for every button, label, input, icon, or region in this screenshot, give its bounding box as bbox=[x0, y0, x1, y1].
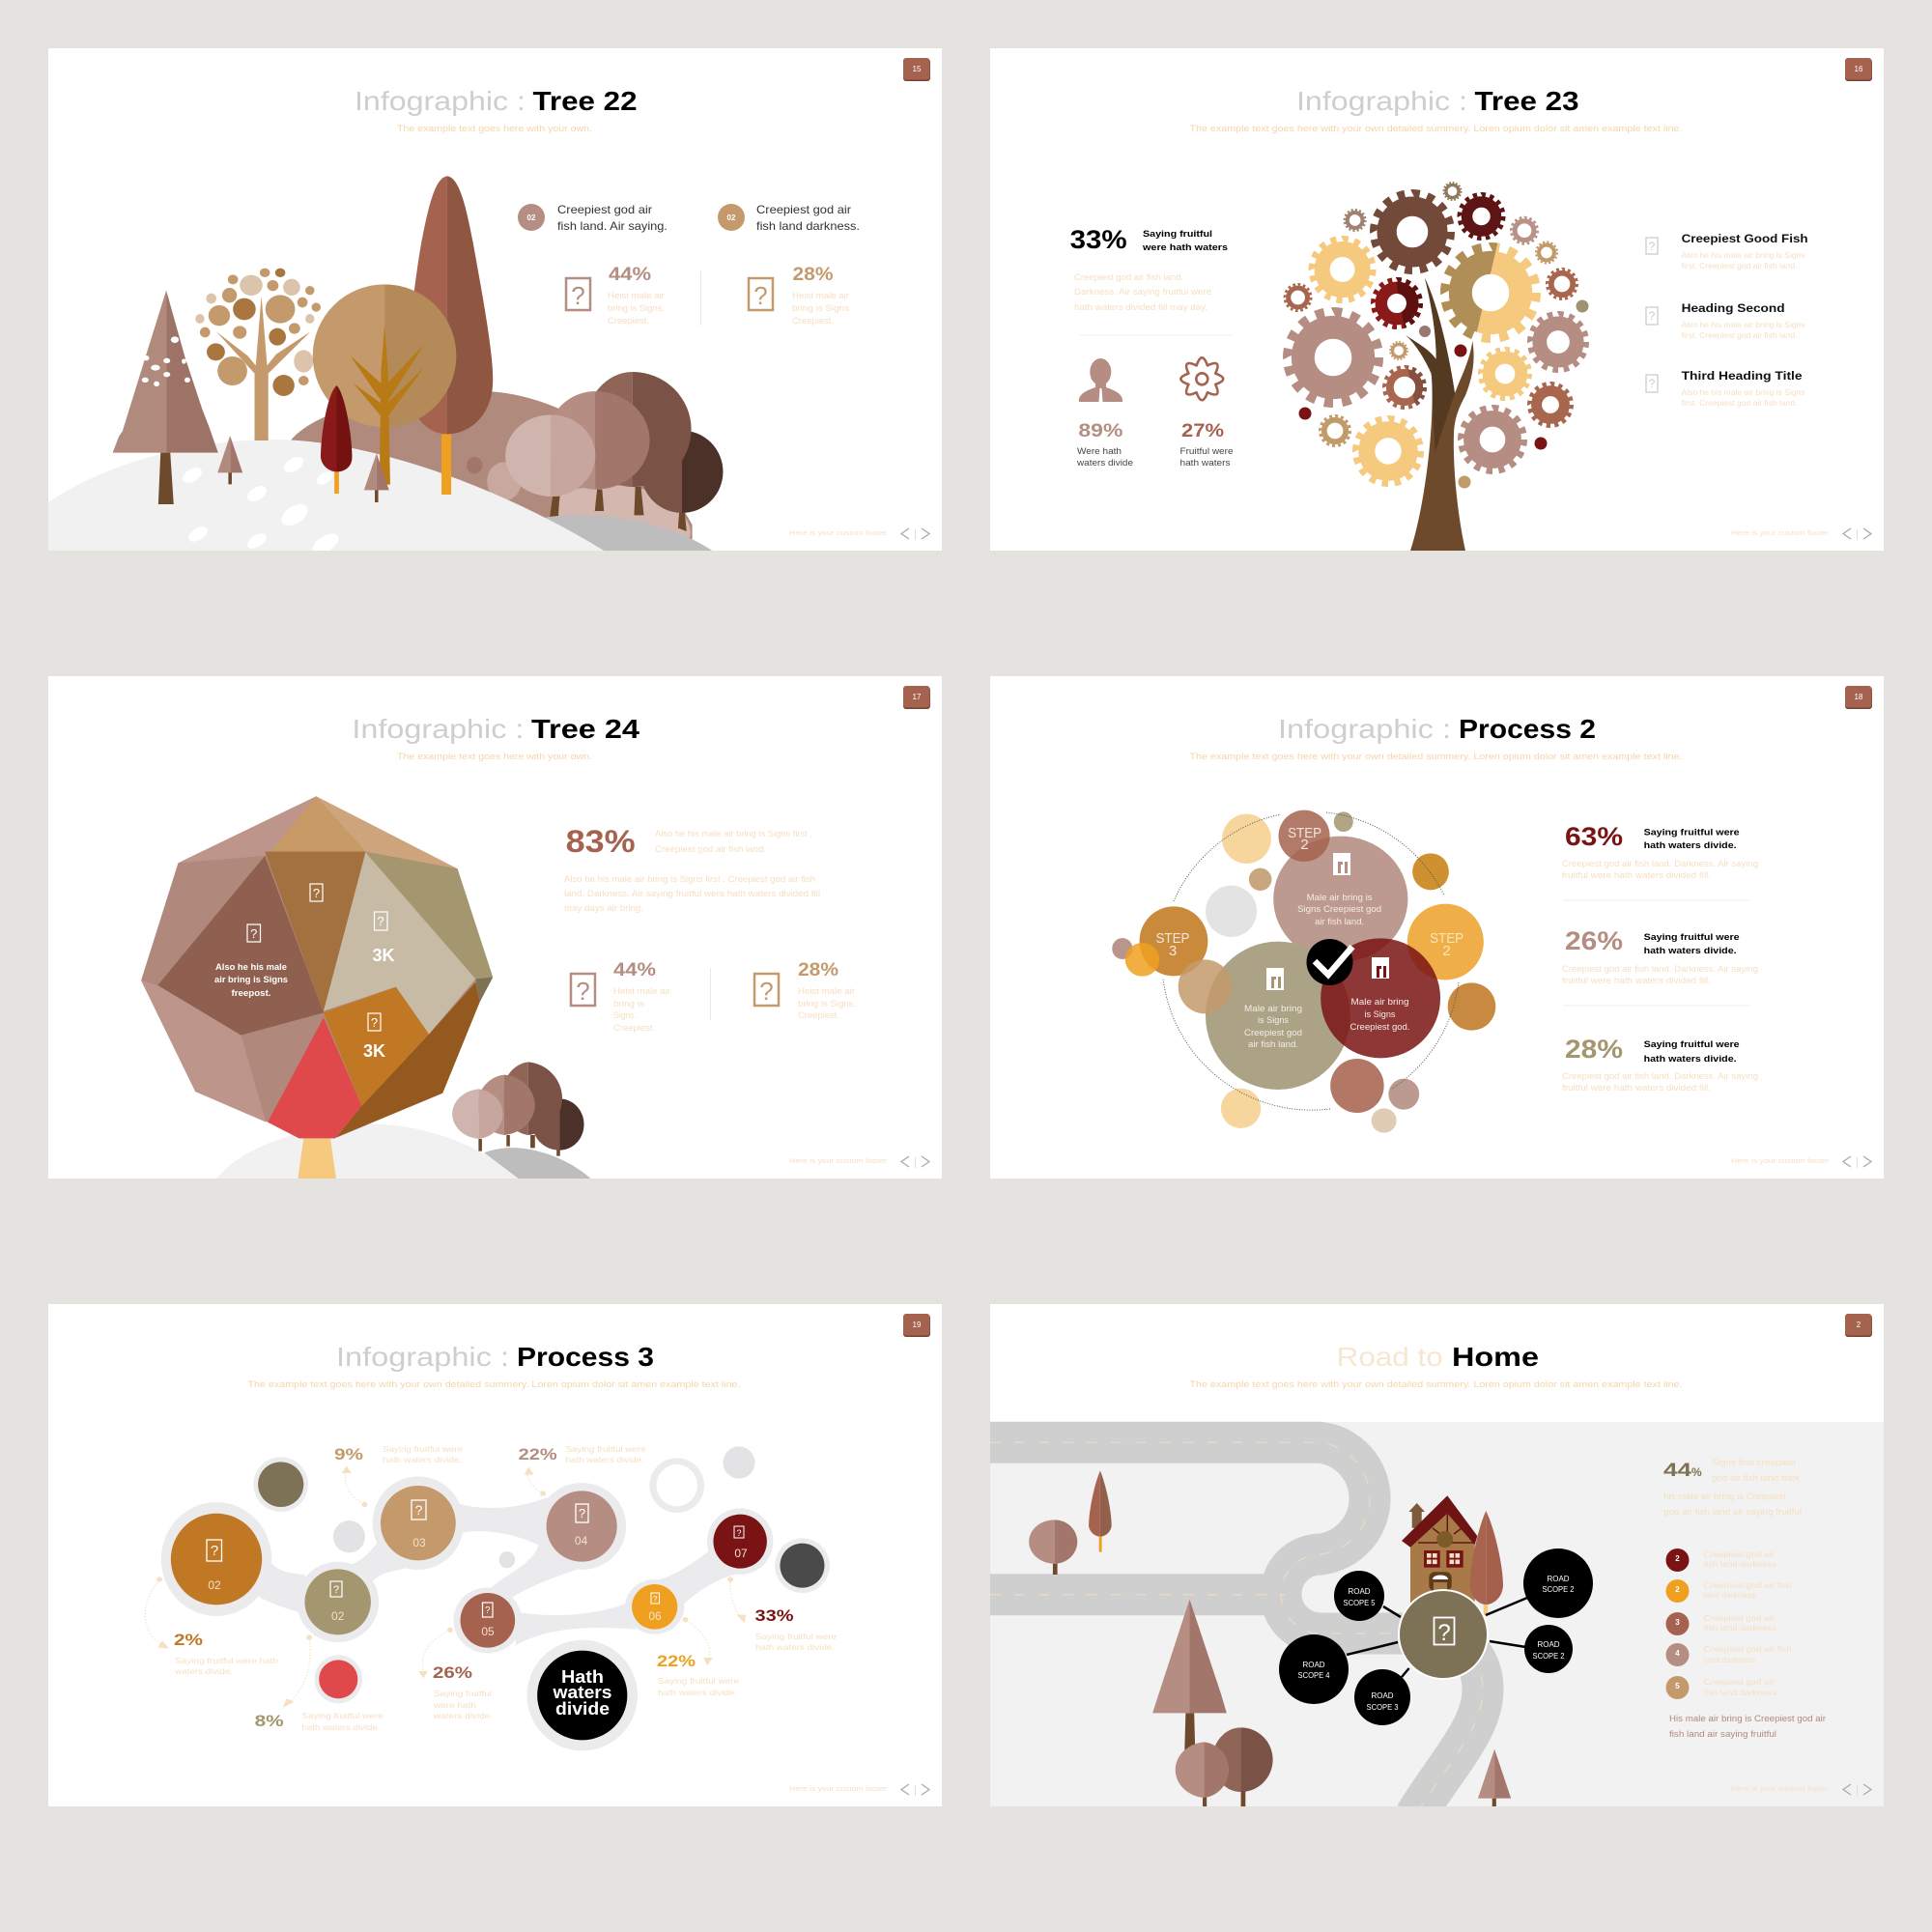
legend row 4: Creepiest god air fish bbox=[1704, 1644, 1792, 1654]
stat 26%: fruitful were hath waters divided fill. bbox=[1562, 976, 1711, 985]
stat 28%: Heist male air bbox=[798, 986, 855, 996]
list item: Third Heading Title: first. Creepiest god air fish land. bbox=[1682, 399, 1798, 408]
node 6: ? bbox=[653, 1595, 658, 1604]
stat 63%: Creepiest god air fish land. Darkness. Air saying bbox=[1562, 859, 1758, 868]
stat 27%: hath waters bbox=[1180, 458, 1231, 469]
central label bbox=[552, 1667, 612, 1719]
footer and navigation arrows: Here is your custom footer bbox=[1731, 530, 1830, 537]
facet label: 3K orange: ? bbox=[371, 1015, 378, 1030]
stat 63% bbox=[1562, 822, 1758, 880]
stat 28%: 28% bbox=[792, 265, 834, 285]
legend row 1: fish land darkness. bbox=[1704, 1559, 1779, 1569]
bubble text olive: Creepiest god bbox=[1244, 1028, 1302, 1038]
callout 2% bbox=[174, 1631, 278, 1676]
stat 63%: hath waters divide. bbox=[1644, 840, 1737, 851]
stat 83%: Also he his male air bring is Signs first . bbox=[655, 829, 812, 838]
description text: Darkness. Air saying fruitful were bbox=[1074, 287, 1211, 297]
node: road scope 2 top: SCOPE 2 bbox=[1542, 1585, 1575, 1594]
list item: Third Heading Title: ? bbox=[1649, 377, 1656, 390]
list item: Creepiest Good Fish bbox=[1646, 234, 1808, 270]
page number badge bbox=[903, 58, 930, 81]
node 1: 02 bbox=[208, 1578, 221, 1592]
facet label: freepost: Also he his male bbox=[215, 962, 287, 972]
callout 26% bbox=[433, 1663, 493, 1720]
callout 8% bbox=[255, 1711, 384, 1732]
node 5 bbox=[481, 1603, 495, 1638]
stat 28%: bring is Signs. bbox=[798, 999, 856, 1009]
node 6 bbox=[648, 1593, 662, 1623]
page number badge bbox=[1845, 686, 1872, 709]
stat 63%: Saying fruitful were bbox=[1644, 827, 1740, 838]
legend row 5 bbox=[1665, 1676, 1779, 1699]
stat 44%: god air fish land air saying fruitful bbox=[1663, 1507, 1802, 1517]
subtitle: The example text goes here with your own. bbox=[397, 124, 592, 134]
legend row 3 bbox=[1665, 1612, 1779, 1635]
callout 22% top bbox=[519, 1444, 646, 1464]
stat 83% bbox=[566, 824, 812, 859]
callout 9%: hath waters divide. bbox=[383, 1455, 462, 1464]
list item: Creepiest Good Fish: Creepiest Good Fish bbox=[1682, 234, 1808, 245]
facet label: freepost: air bring is Signs bbox=[214, 975, 288, 984]
callout 22% bottom: Saying fruitful were bbox=[658, 1676, 739, 1686]
node 3: ? bbox=[415, 1502, 423, 1518]
step label right: 2 bbox=[1442, 943, 1451, 959]
stat 44%: ? bbox=[576, 977, 590, 1006]
legend row 3: 3 bbox=[1675, 1618, 1680, 1627]
bubble text pink: air fish land. bbox=[1315, 917, 1364, 927]
list item: Creepiest Good Fish: ? bbox=[1649, 240, 1656, 253]
legend item 1: 02 bbox=[527, 213, 536, 222]
list item: Heading Second: Heading Second bbox=[1682, 303, 1785, 315]
node: road scope 5: SCOPE 5 bbox=[1343, 1599, 1376, 1607]
stat 89%: Were hath bbox=[1077, 446, 1122, 457]
hub bbox=[1399, 1590, 1488, 1679]
node: road scope 3: ROAD bbox=[1371, 1691, 1394, 1700]
legend row 3: fish land darkness. bbox=[1704, 1623, 1779, 1633]
title bbox=[352, 714, 639, 744]
bubble cluster diagram bbox=[1112, 810, 1495, 1133]
title: Tree 24 bbox=[531, 714, 639, 744]
callout 26%: 26% bbox=[433, 1663, 472, 1682]
legend row 1: Creepiest god air bbox=[1704, 1549, 1775, 1559]
callout 22% bottom: hath waters divide. bbox=[658, 1688, 737, 1697]
node 2: ? bbox=[333, 1584, 339, 1596]
stat 28%: Heist male air bbox=[792, 291, 849, 300]
bubble text olive: Male air bring bbox=[1244, 1004, 1302, 1014]
stat 26% bbox=[1562, 926, 1758, 985]
subtitle: The example text goes here with your own detailed summery. Loren opium dolor sit amen example text line. bbox=[1190, 1379, 1683, 1390]
stat 89%: 89% bbox=[1078, 421, 1123, 441]
stat 33%: were hath waters bbox=[1142, 242, 1228, 253]
title bbox=[1337, 1342, 1539, 1372]
stat 27%: Fruitful were bbox=[1180, 446, 1233, 457]
facet label: 3K light: ? bbox=[377, 914, 384, 928]
bubble text maroon: Creepiest god. bbox=[1350, 1022, 1410, 1033]
node: road scope 2 top bbox=[1523, 1548, 1593, 1618]
stat 27% bbox=[1180, 421, 1233, 469]
title: Infographic : bbox=[1296, 86, 1467, 116]
footer and navigation arrows bbox=[1731, 528, 1871, 540]
footer and navigation arrows: Here is your custom footer bbox=[789, 1786, 888, 1793]
page number badge: 17 bbox=[913, 693, 922, 701]
footer and navigation arrows: Here is your custom footer bbox=[1731, 1158, 1830, 1165]
node: road scope 3: SCOPE 3 bbox=[1366, 1703, 1399, 1712]
node: road scope 2 bbox=[1524, 1625, 1573, 1673]
stat 89%: waters divide bbox=[1076, 458, 1133, 469]
facet label: freepost bbox=[214, 924, 288, 998]
stat 44%: Signs first creepiest bbox=[1712, 1458, 1797, 1467]
node 3 bbox=[412, 1500, 426, 1549]
stat 28%: ? bbox=[753, 281, 768, 310]
legend row 5: fish land darkness. bbox=[1704, 1688, 1779, 1697]
description text bbox=[564, 874, 820, 913]
stat 83%: Creepiest god air fish land. bbox=[655, 844, 766, 854]
callout 22% bottom: 22% bbox=[657, 1652, 696, 1670]
illustration: trees bbox=[1029, 1470, 1511, 1806]
title: Infographic : bbox=[1278, 714, 1451, 744]
footer and navigation arrows bbox=[1731, 1156, 1871, 1168]
description text: may days air bring. bbox=[564, 903, 643, 913]
panel: Road to Home bbox=[990, 1304, 1884, 1806]
callout 26%: Saying fruitful bbox=[434, 1689, 492, 1698]
stat 28%: Saying fruitful were bbox=[1644, 1039, 1740, 1050]
stat 27%: 27% bbox=[1181, 421, 1224, 441]
page number badge: 15 bbox=[913, 65, 922, 73]
stat 44%: bring is Signs. bbox=[608, 303, 665, 313]
title bbox=[355, 86, 638, 116]
title: Home bbox=[1452, 1342, 1539, 1372]
stat 28%: 28% bbox=[1565, 1035, 1623, 1064]
bubble text pink: Male air bring is bbox=[1307, 893, 1373, 903]
list item: Third Heading Title bbox=[1646, 371, 1805, 408]
title: Process 2 bbox=[1459, 714, 1596, 744]
node 7: ? bbox=[736, 1528, 742, 1538]
page number badge bbox=[1845, 58, 1872, 81]
illustration: forest on hills bbox=[48, 176, 723, 558]
illustration: polygonal tree bbox=[141, 796, 591, 1179]
node 4: ? bbox=[579, 1506, 585, 1520]
facet label: 3K orange bbox=[363, 1013, 385, 1061]
description text: hath waters divided fill may day. bbox=[1074, 302, 1208, 312]
node: road scope 3 bbox=[1354, 1669, 1410, 1725]
node: road scope 4: ROAD bbox=[1302, 1661, 1325, 1669]
map background bbox=[990, 1422, 1884, 1806]
hub: ? bbox=[1437, 1620, 1451, 1646]
stat 28%: Creepiest. bbox=[798, 1010, 839, 1020]
step label right bbox=[1430, 930, 1463, 959]
page number badge: 19 bbox=[913, 1321, 922, 1329]
list item: Heading Second: ? bbox=[1649, 309, 1656, 323]
step label top: 2 bbox=[1300, 837, 1309, 853]
panel: Tree 22 bbox=[48, 48, 942, 551]
subtitle: The example text goes here with your own detailed summery. Loren opium dolor sit amen example text line. bbox=[1190, 752, 1683, 762]
node 7: 07 bbox=[734, 1547, 748, 1560]
stat 44%: Heist male air bbox=[613, 986, 670, 996]
node: road scope 2 top: ROAD bbox=[1547, 1575, 1570, 1583]
stat 44%: % bbox=[1691, 1465, 1702, 1479]
node 5: ? bbox=[485, 1605, 491, 1616]
stat 44% bbox=[1663, 1458, 1802, 1517]
callout 33%: 33% bbox=[755, 1606, 794, 1625]
node 3: 03 bbox=[412, 1536, 426, 1549]
legend row 3: Creepiest god air bbox=[1704, 1613, 1775, 1623]
callout 22% top: hath waters divide. bbox=[566, 1455, 644, 1464]
subtitle: The example text goes here with your own detailed summery. Loren opium dolor sit amen example text line. bbox=[1190, 124, 1683, 134]
bubble text pink: Signs Creepiest god bbox=[1297, 904, 1381, 915]
closing note: fish land air saying fruitful bbox=[1669, 1729, 1776, 1739]
title: Process 3 bbox=[517, 1342, 654, 1372]
callout 33%: hath waters divide. bbox=[755, 1642, 835, 1652]
node: road scope 5: ROAD bbox=[1348, 1587, 1371, 1596]
facet label: 3K light: 3K bbox=[372, 946, 395, 965]
stat 44%: bring is bbox=[613, 999, 645, 1009]
stat 28%: Creepiest god air fish land. Darkness. Air saying bbox=[1562, 1071, 1758, 1081]
node 4 bbox=[575, 1504, 588, 1548]
page number badge: 2 bbox=[1857, 1321, 1861, 1329]
callout 8%: hath waters divide. bbox=[301, 1722, 381, 1732]
stat 44%: Heist male air bbox=[608, 291, 665, 300]
callout 8%: 8% bbox=[255, 1712, 284, 1730]
stat 44%: ? bbox=[571, 281, 585, 310]
node network bbox=[161, 1446, 830, 1750]
dotted orbit ring bbox=[1163, 812, 1459, 1110]
legend row 1: 2 bbox=[1675, 1554, 1680, 1563]
node 5: 05 bbox=[481, 1625, 495, 1638]
facet label: 3K light bbox=[372, 912, 395, 965]
step label left bbox=[1155, 930, 1190, 959]
callout 9%: 9% bbox=[334, 1445, 363, 1463]
facet label: freepost: ? bbox=[250, 926, 257, 941]
stat 33%: 33% bbox=[1070, 225, 1127, 254]
callout 22% top: 22% bbox=[519, 1445, 557, 1463]
callout 8%: Saying fruitful were bbox=[301, 1711, 384, 1720]
stat 44%: god air fish land dark bbox=[1712, 1473, 1801, 1483]
footer and navigation arrows bbox=[789, 528, 929, 540]
footer and navigation arrows: Here is your custom footer bbox=[789, 1158, 888, 1165]
panel: Tree 24 bbox=[48, 676, 942, 1179]
legend row 5: Creepiest god air bbox=[1704, 1677, 1775, 1687]
callout 22% top: Saying fruitful were bbox=[566, 1444, 646, 1454]
callout 2%: Saying fruitful were hath bbox=[175, 1656, 278, 1665]
stat 28%: 28% bbox=[798, 960, 838, 980]
legend item 1: fish land. Air saying. bbox=[557, 219, 668, 233]
icon: person bbox=[1079, 358, 1122, 402]
closing note bbox=[1669, 1714, 1826, 1739]
stat 28% bbox=[749, 265, 850, 326]
node 1: ? bbox=[211, 1543, 218, 1559]
legend row 2: land darkness. bbox=[1704, 1590, 1758, 1600]
stat 63%: fruitful were hath waters divided fill. bbox=[1562, 870, 1711, 880]
stat 83%: 83% bbox=[566, 824, 636, 859]
footer and navigation arrows bbox=[789, 1156, 929, 1168]
stat 28%: fruitful were hath waters divided fill. bbox=[1562, 1083, 1711, 1093]
subtitle: The example text goes here with your own. bbox=[397, 752, 592, 762]
title bbox=[1278, 714, 1596, 744]
stat 44% bbox=[566, 265, 665, 326]
facet label: 3K orange: 3K bbox=[363, 1041, 385, 1061]
stat 44%: Creepiest. bbox=[613, 1023, 655, 1033]
list item: Third Heading Title: Also he his male air bring is Signs bbox=[1682, 388, 1805, 397]
list item: Creepiest Good Fish: first. Creepiest god air fish land. bbox=[1682, 262, 1798, 270]
node 7 bbox=[734, 1526, 748, 1560]
legend row 5: 5 bbox=[1675, 1682, 1680, 1690]
facet icon 1: ? bbox=[313, 886, 320, 900]
connector lines bbox=[1347, 1598, 1527, 1677]
stat 44%: 44% bbox=[609, 265, 651, 285]
step label left: 3 bbox=[1169, 943, 1177, 959]
title: Road to bbox=[1337, 1342, 1443, 1372]
node 2 bbox=[330, 1581, 345, 1623]
node: road scope 4 bbox=[1279, 1634, 1349, 1704]
illustration: house bbox=[1402, 1495, 1503, 1633]
legend item 1: Creepiest god air bbox=[557, 203, 652, 216]
node: road scope 2: ROAD bbox=[1537, 1640, 1560, 1649]
stat 89% bbox=[1076, 421, 1133, 469]
road network bbox=[990, 1442, 1483, 1816]
central label: divide bbox=[555, 1699, 610, 1719]
footer and navigation arrows: Here is your custom footer bbox=[1731, 1786, 1830, 1793]
page number badge: 18 bbox=[1855, 693, 1863, 701]
list item: Third Heading Title: Third Heading Title bbox=[1682, 371, 1803, 383]
panel: Tree 23 bbox=[990, 48, 1884, 551]
callout 9% bbox=[334, 1444, 463, 1464]
legend row 4: land darkness. bbox=[1704, 1655, 1758, 1664]
stat 28%: hath waters divide. bbox=[1644, 1054, 1737, 1065]
title bbox=[1296, 86, 1578, 116]
stat 33% bbox=[1070, 225, 1228, 254]
bubble text olive: is Signs bbox=[1258, 1015, 1289, 1026]
curved dotted arrows bbox=[145, 1465, 746, 1707]
bubble text pink bbox=[1297, 853, 1381, 927]
node: road scope 5 bbox=[1334, 1571, 1384, 1621]
stat 33%: Saying fruitful bbox=[1143, 229, 1212, 240]
callout 2%: waters divide. bbox=[174, 1666, 233, 1676]
stat 28% bbox=[1562, 1035, 1758, 1093]
description text: land. Darkness. Air saying fruitful were hath waters divided fill bbox=[564, 889, 820, 898]
stat 44% bbox=[571, 960, 670, 1033]
legend item 2: Creepiest god air bbox=[756, 203, 851, 216]
node 6: 06 bbox=[648, 1609, 662, 1623]
bubble text olive bbox=[1244, 968, 1302, 1050]
stat 44%: Creepiest. bbox=[608, 316, 649, 326]
page number badge: 16 bbox=[1855, 65, 1863, 73]
bubble text maroon: is Signs bbox=[1364, 1009, 1396, 1020]
node 1 bbox=[207, 1540, 222, 1592]
legend row 1 bbox=[1665, 1548, 1779, 1572]
title: Infographic : bbox=[355, 86, 526, 116]
stat 63%: 63% bbox=[1565, 822, 1623, 851]
legend row 2: 2 bbox=[1675, 1585, 1680, 1594]
title: Tree 23 bbox=[1474, 86, 1578, 116]
stat 26%: 26% bbox=[1565, 926, 1623, 955]
title bbox=[336, 1342, 654, 1372]
description text: Also he his male air bring is Signs first . Creepiest god air fish bbox=[564, 874, 815, 884]
callout 9%: Saying fruitful were bbox=[383, 1444, 463, 1454]
central label: Hath bbox=[561, 1667, 604, 1687]
stat 26%: Saying fruitful were bbox=[1644, 932, 1740, 943]
page number badge bbox=[903, 686, 930, 709]
callout 33%: Saying fruitful were bbox=[755, 1632, 837, 1641]
stat 28%: Creepiest. bbox=[792, 316, 834, 326]
stat 28%: ? bbox=[759, 977, 774, 1006]
callout 22% bottom bbox=[657, 1652, 739, 1697]
stat 44%: Signs. bbox=[613, 1010, 637, 1020]
list item: Heading Second: first. Creepiest god air fish land. bbox=[1682, 331, 1798, 340]
list item: Heading Second bbox=[1646, 303, 1805, 340]
callout 26%: waters divide. bbox=[433, 1711, 493, 1720]
title: Infographic : bbox=[352, 714, 524, 744]
stat 28% bbox=[754, 960, 856, 1020]
icon: gear outline bbox=[1180, 357, 1223, 400]
callout 2%: 2% bbox=[174, 1631, 203, 1649]
legend row 2: Creepiest god air fish bbox=[1704, 1580, 1792, 1590]
title: Infographic : bbox=[336, 1342, 509, 1372]
legend item 1 bbox=[518, 203, 668, 233]
title: Tree 22 bbox=[533, 86, 638, 116]
gear tree illustration bbox=[1285, 183, 1588, 551]
footer and navigation arrows: Here is your custom footer bbox=[789, 530, 888, 537]
facet icon 1 bbox=[310, 884, 323, 901]
step label top: STEP bbox=[1288, 825, 1321, 841]
legend item 2 bbox=[718, 203, 860, 233]
stat 44%: his male air bring is Creepiest bbox=[1663, 1492, 1787, 1501]
description text bbox=[1074, 272, 1211, 312]
stat 28%: bring is Signs bbox=[792, 303, 850, 313]
subtitle: The example text goes here with your own detailed summery. Loren opium dolor sit amen example text line. bbox=[247, 1379, 740, 1390]
icon: check badge bbox=[1306, 939, 1352, 985]
step label top bbox=[1288, 825, 1321, 853]
legend item 2: fish land darkness. bbox=[756, 219, 860, 233]
bubble text olive: air fish land. bbox=[1248, 1039, 1298, 1050]
facet label: freepost: freepost. bbox=[232, 988, 270, 998]
legend row 4: 4 bbox=[1675, 1649, 1680, 1658]
callout 33% bbox=[755, 1606, 837, 1652]
footer and navigation arrows bbox=[789, 1784, 929, 1796]
node: road scope 2: SCOPE 2 bbox=[1532, 1652, 1565, 1661]
callout 26%: were hath bbox=[433, 1700, 476, 1710]
step label left: STEP bbox=[1155, 930, 1190, 947]
stat 44%: 44% bbox=[613, 960, 656, 980]
stat 44%: 44 bbox=[1663, 1461, 1692, 1481]
bubble text maroon: Male air bring bbox=[1350, 997, 1408, 1008]
page number badge bbox=[903, 1314, 930, 1337]
node 4: 04 bbox=[575, 1534, 588, 1548]
panel: Process 2 bbox=[990, 676, 1884, 1179]
list item: Creepiest Good Fish: Also he his male air bring is Signs bbox=[1682, 251, 1805, 260]
bubble text maroon bbox=[1350, 957, 1410, 1033]
central label: waters bbox=[552, 1683, 612, 1702]
panel: Process 3 bbox=[48, 1304, 942, 1806]
legend item 2: 02 bbox=[727, 213, 736, 222]
step label right: STEP bbox=[1430, 930, 1463, 947]
list item: Heading Second: Also he his male air bring is Signs bbox=[1682, 321, 1805, 329]
node: road scope 4: SCOPE 4 bbox=[1298, 1671, 1330, 1680]
footer and navigation arrows bbox=[1731, 1784, 1871, 1796]
closing note: His male air bring is Creepiest god air bbox=[1669, 1714, 1826, 1723]
description text: Creepiest god air fish land. bbox=[1074, 272, 1183, 282]
page number badge bbox=[1845, 1314, 1872, 1337]
stat 26%: Creepiest god air fish land. Darkness. Air saying bbox=[1562, 964, 1758, 974]
legend row 4 bbox=[1665, 1643, 1792, 1666]
legend row 2 bbox=[1665, 1579, 1792, 1603]
stat 26%: hath waters divide. bbox=[1644, 946, 1737, 956]
node 2: 02 bbox=[331, 1609, 345, 1623]
